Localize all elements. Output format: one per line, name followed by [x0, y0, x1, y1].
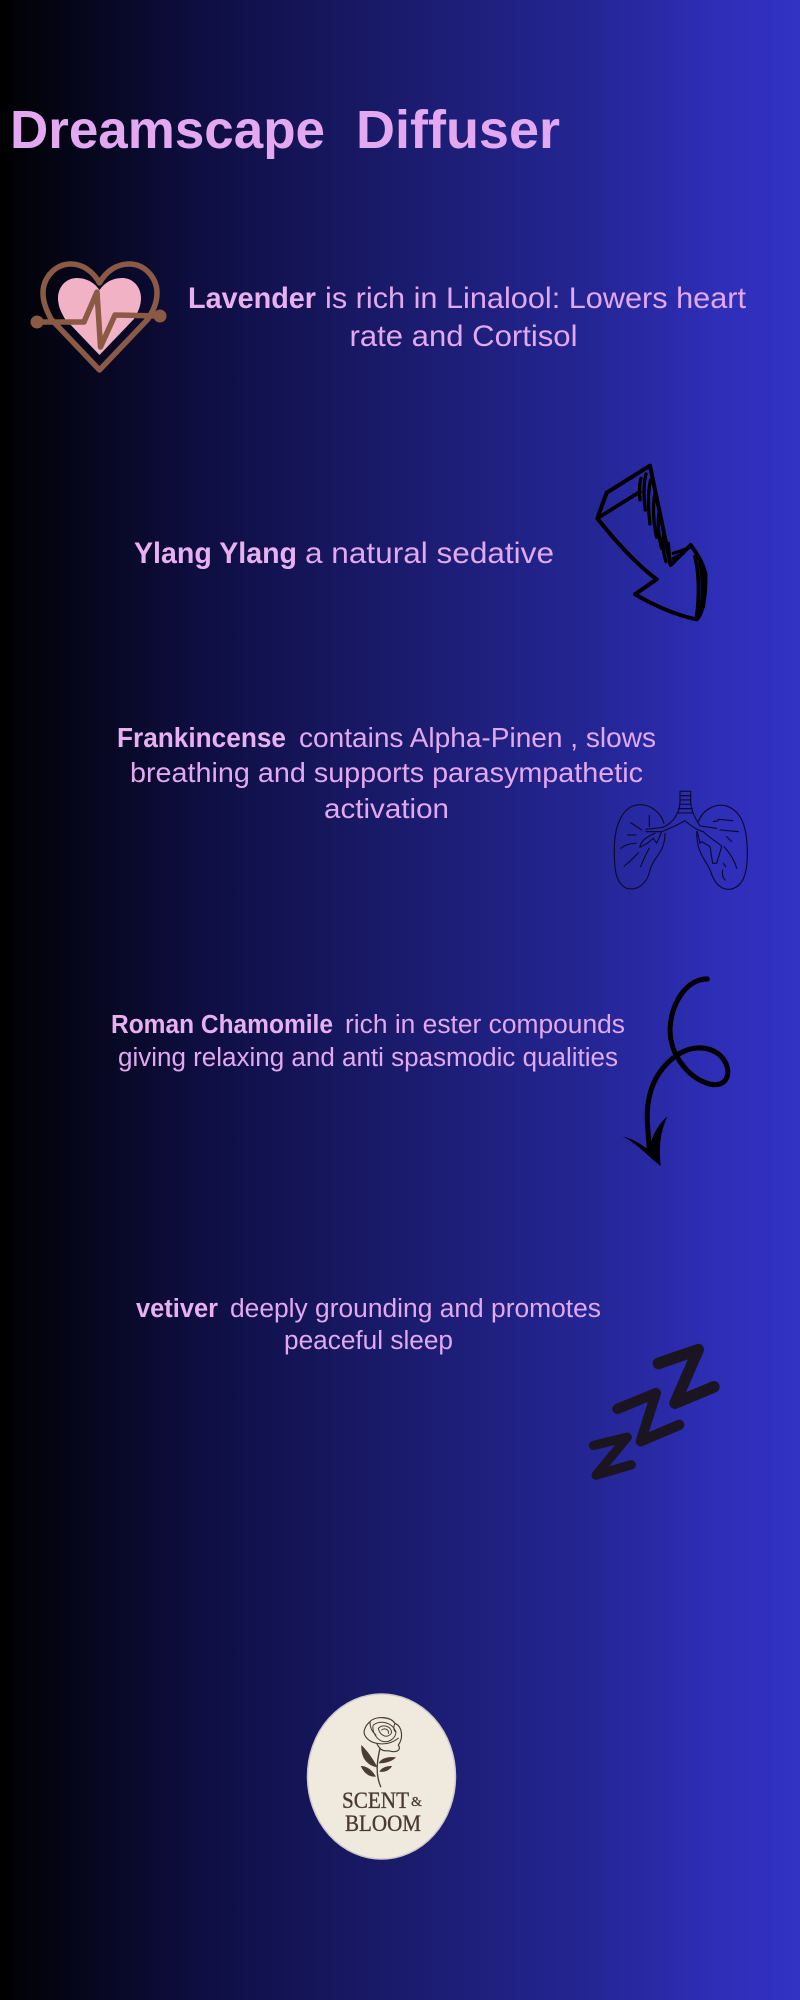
text: frankincense: contains Alpha-Pinen , slows	[299, 722, 656, 753]
text: lavender: is rich in Linalool: Lowers heart	[325, 282, 747, 315]
text: vetiver: deeply grounding and promotes	[230, 1295, 601, 1323]
text: lavender	[188, 282, 747, 353]
text: frankincense: breathing and supports parasympathetic	[130, 757, 643, 788]
text: ylang ylang: a natural sedative	[305, 537, 554, 570]
logo wordmark	[342, 1788, 422, 1836]
title: Dreamscape	[10, 100, 325, 160]
icon: heart with pulse	[30, 264, 166, 370]
text: ylang ylang	[134, 537, 554, 570]
text: roman chamomile: Roman Chamomile	[111, 1011, 333, 1039]
logo wordmark: &	[411, 1795, 422, 1810]
text: lavender: rate and Cortisol	[350, 320, 578, 353]
text: frankincense	[117, 722, 656, 824]
text: roman chamomile: giving relaxing and anti spasmodic qualities	[118, 1044, 618, 1072]
text: lavender: Lavender	[188, 282, 316, 315]
logo wordmark: BLOOM	[345, 1811, 421, 1836]
text: vetiver: vetiver	[136, 1295, 218, 1323]
logo: scent and bloom	[308, 1694, 456, 1859]
icon: zzz	[593, 1350, 714, 1475]
text: frankincense: activation	[324, 793, 449, 824]
text: frankincense: Frankincense	[117, 722, 286, 753]
title: Diffuser	[356, 100, 560, 160]
text: roman chamomile: rich in ester compounds	[345, 1011, 625, 1039]
text: vetiver	[136, 1295, 601, 1355]
text: ylang ylang: Ylang Ylang	[134, 537, 297, 570]
icon: lungs	[614, 791, 747, 889]
icon: rose	[361, 1718, 402, 1787]
text: vetiver: peaceful sleep	[284, 1327, 453, 1355]
title	[10, 100, 560, 160]
logo wordmark: SCENT	[342, 1788, 409, 1813]
icon: sketched down arrow	[597, 466, 705, 619]
text: roman chamomile	[111, 1011, 625, 1072]
icon: looping arrow	[623, 979, 728, 1166]
